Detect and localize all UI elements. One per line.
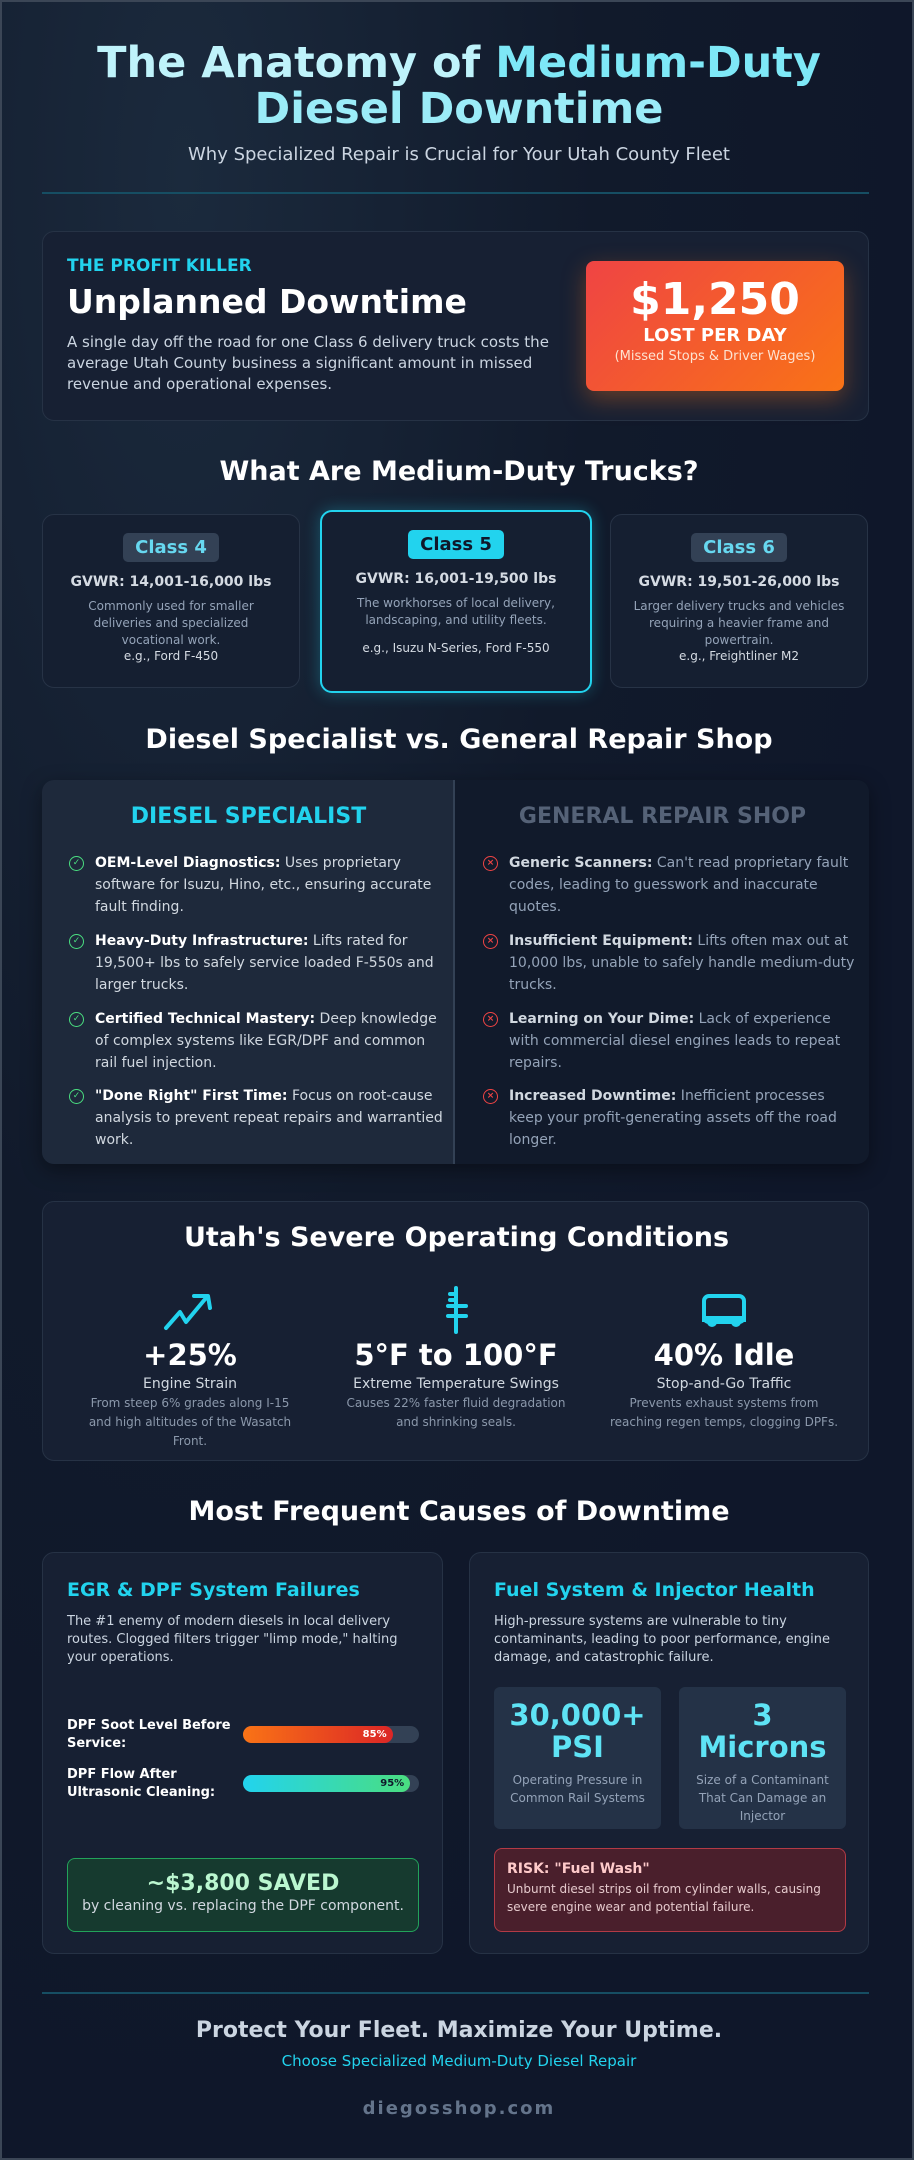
column: general repair shop: × xyxy=(487,1091,494,1101)
heading: causes: Most Frequent Causes of Downtime xyxy=(188,1496,730,1527)
bar: soot xyxy=(67,1718,419,1751)
callout: fuel wash risk: Unburnt diesel strips oil from cylinder walls, causing severe engine wear and potential failure. xyxy=(507,1882,821,1914)
stat: idle: Stop-and-Go Traffic xyxy=(657,1376,791,1392)
stat box: PSI: Operating Pressure in xyxy=(513,1773,642,1787)
card: class 6: GVWR: 19,501-26,000 lbs xyxy=(639,574,839,590)
heading: comparison: Diesel Specialist vs. General Repair Shop xyxy=(145,724,773,755)
callout: cost xyxy=(586,261,844,391)
panel: utah conditions xyxy=(42,1201,869,1461)
card: class 4: Commonly used for smaller deliveries and specialized vocational work. xyxy=(88,599,254,647)
card: class 6: Larger delivery trucks and vehicles requiring a heavier frame and powertrain. xyxy=(634,599,844,647)
body text: A single day off the road for one Class 6 delivery truck costs the average Utah County business a significant amount in missed revenue and operational expenses. xyxy=(67,333,549,393)
card: class 6: e.g., Freightliner M2 xyxy=(679,649,799,663)
card: class 5 xyxy=(320,510,592,693)
column: diesel specialist: ✓ xyxy=(73,936,80,946)
item: Certified Technical Mastery: Deep knowledge of complex systems like EGR/DPF and common rail fuel injection. xyxy=(95,1011,437,1071)
callout: fuel wash risk: RISK: "Fuel Wash" xyxy=(507,1861,650,1877)
item: "Done Right" First Time: Focus on root-cause analysis to prevent repeat repairs and warrantied work. xyxy=(95,1088,443,1148)
card: class 6 xyxy=(610,514,868,688)
callout: savings xyxy=(67,1858,419,1932)
stat: temperature: 5°F to 100°F xyxy=(354,1338,558,1372)
card: class 5: GVWR: 16,001-19,500 lbs xyxy=(356,571,556,587)
stat: temperature: Causes 22% faster fluid degradation and shrinking seals. xyxy=(346,1396,565,1429)
panel: profit killer xyxy=(42,231,869,421)
bar: soot: 85% xyxy=(363,1729,387,1740)
stat box: PSI: Common Rail Systems xyxy=(510,1791,645,1805)
bar: flow xyxy=(67,1767,419,1800)
CTA subtitle: Choose Specialized Medium-Duty Diesel Repair xyxy=(282,2052,636,2070)
bar: soot: DPF Soot Level Before Service: xyxy=(67,1718,231,1751)
card: class 5: Class 5 xyxy=(420,534,492,555)
body: High-pressure systems are vulnerable to tiny contaminants, leading to poor performance, engine damage, and catastrophic failure. xyxy=(494,1614,830,1665)
card: class 5: The workhorses of local delivery, landscaping, and utility fleets. xyxy=(357,596,555,627)
heading: trucks: What Are Medium-Duty Trucks? xyxy=(220,456,698,487)
column heading: DIESEL SPECIALIST xyxy=(131,804,366,829)
callout: cost: LOST PER DAY xyxy=(643,325,787,346)
stat box: microns: Size of a Contaminant That Can Damage an Injector xyxy=(696,1773,829,1823)
panel: comparison xyxy=(42,780,869,1164)
title: Diesel Downtime xyxy=(255,84,663,134)
icon: thermometer xyxy=(446,1286,468,1334)
card: class 4: Class 4 xyxy=(135,537,207,558)
item: Increased Downtime: Inefficient processes keep your profit-generating assets off the road longer. xyxy=(509,1088,837,1148)
card: class 6: Class 6 xyxy=(703,537,775,558)
stat box: microns: 3 xyxy=(752,1698,773,1732)
stat: engine strain: +25% xyxy=(143,1338,237,1372)
stat box: microns xyxy=(679,1687,846,1829)
stat: temperature: Extreme Temperature Swings xyxy=(353,1376,559,1392)
card: class 4 xyxy=(42,514,300,688)
stat box: PSI: PSI xyxy=(551,1730,604,1764)
bar: flow: 95% xyxy=(380,1778,404,1789)
card: class 4: e.g., Ford F-450 xyxy=(124,649,218,663)
footer domain: diegosshop.com xyxy=(363,2098,555,2119)
item: Insufficient Equipment: Lifts often max out at 10,000 lbs, unable to safely handle medium-duty trucks. xyxy=(509,933,854,993)
stat box: PSI: 30,000+ xyxy=(509,1698,646,1732)
title xyxy=(97,38,821,134)
callout: savings: ~$3,800 SAVED xyxy=(147,1871,339,1896)
CTA heading: Protect Your Fleet. Maximize Your Uptime. xyxy=(196,2018,722,2043)
heading: EGR & DPF System Failures xyxy=(67,1579,360,1601)
item: Heavy-Duty Infrastructure: Lifts rated for 19,500+ lbs to safely service loaded F-550s and larger trucks. xyxy=(95,933,434,993)
callout: fuel wash risk xyxy=(494,1848,846,1932)
column: general repair shop: × xyxy=(487,936,494,946)
column: diesel specialist: ✓ xyxy=(73,1014,80,1024)
item: Learning on Your Dime: Lack of experience with commercial diesel engines leads to repeat repairs. xyxy=(509,1011,840,1071)
card: class 4: GVWR: 14,001-16,000 lbs xyxy=(71,574,271,590)
body: The #1 enemy of modern diesels in local delivery routes. Clogged filters trigger "limp mode," halting your operations. xyxy=(67,1614,397,1665)
card: class 5: e.g., Isuzu N-Series, Ford F-550 xyxy=(362,641,550,655)
column: diesel specialist: ✓ xyxy=(73,858,80,868)
stat: engine strain: Engine Strain xyxy=(143,1376,237,1392)
stat box: microns: Microns xyxy=(698,1730,827,1764)
stat: idle: Prevents exhaust systems from reaching regen temps, clogging DPFs. xyxy=(610,1396,838,1429)
panel: EGR & DPF xyxy=(42,1552,443,1954)
column: diesel specialist xyxy=(42,780,455,1164)
callout: savings: by cleaning vs. replacing the DPF component. xyxy=(82,1898,404,1914)
title: The Anatomy of Medium-Duty xyxy=(97,38,821,88)
column: general repair shop: × xyxy=(487,1014,494,1024)
item: Generic Scanners: Can't read proprietary fault codes, leading to guesswork and inaccurate quotes. xyxy=(509,855,848,915)
heading: Fuel System & Injector Health xyxy=(494,1579,815,1601)
stat: engine strain xyxy=(89,1294,291,1448)
stat: temperature xyxy=(346,1286,565,1429)
bar: flow: DPF Flow After Ultrasonic Cleaning: xyxy=(67,1767,215,1800)
eyebrow: THE PROFIT KILLER xyxy=(67,256,252,276)
item: OEM-Level Diagnostics: Uses proprietary software for Isuzu, Hino, etc., ensuring accurate fault finding. xyxy=(95,855,431,915)
panel: fuel system xyxy=(469,1552,869,1954)
subtitle: Why Specialized Repair is Crucial for Your Utah County Fleet xyxy=(188,144,730,165)
callout: cost: $1,250 xyxy=(630,274,800,325)
callout: cost: (Missed Stops & Driver Wages) xyxy=(615,349,815,364)
icon: trend up xyxy=(164,1294,212,1330)
column heading: GENERAL REPAIR SHOP xyxy=(519,804,806,829)
stat: idle xyxy=(610,1294,838,1429)
heading: Unplanned Downtime xyxy=(67,282,467,321)
heading: Utah's Severe Operating Conditions xyxy=(184,1222,729,1253)
stat: engine strain: From steep 6% grades along I-15 and high altitudes of the Wasatch Front. xyxy=(89,1396,291,1448)
column: diesel specialist: ✓ xyxy=(73,1091,80,1101)
icon: vehicle xyxy=(702,1294,746,1327)
column: general repair shop: × xyxy=(487,858,494,868)
stat box: PSI xyxy=(494,1687,661,1829)
stat: idle: 40% Idle xyxy=(654,1338,794,1372)
column: general repair shop xyxy=(483,804,854,1148)
